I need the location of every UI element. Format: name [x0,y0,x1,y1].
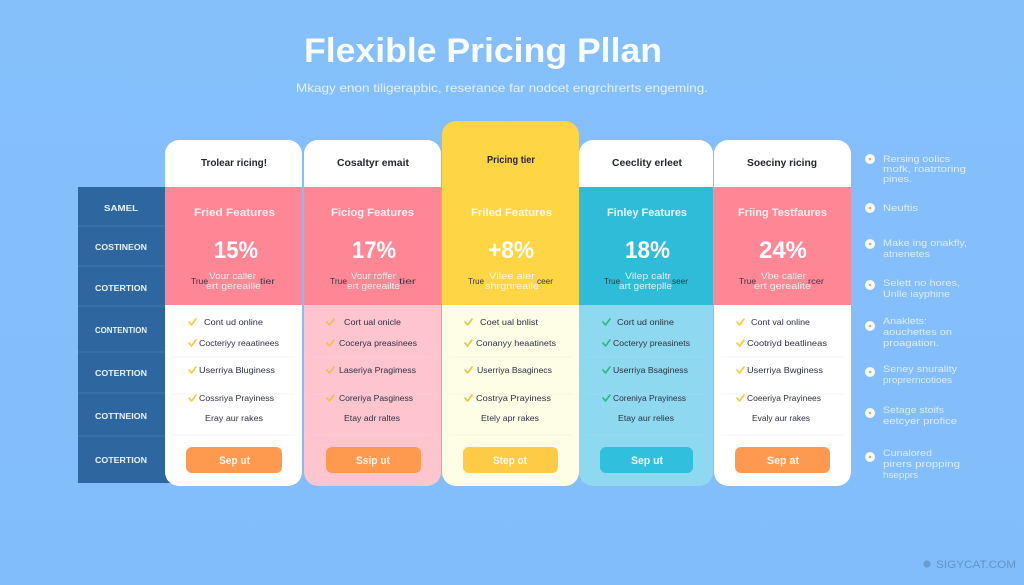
panel: side notes: Setage stoifs [883,405,944,416]
panel: pricing column 3 highlighted: shrgnreaile [485,281,539,292]
panel: pricing column 5: rcer [808,277,824,286]
panel: pricing column 5: Sep at [767,455,799,467]
panel: row label sidebar: COTERTION [95,368,147,378]
panel: pricing column 4: Vilep caltr [625,271,671,282]
panel: pricing column 3 highlighted: Etely apr rakes [481,413,539,423]
panel: side notes: eetcyer profice [883,416,957,427]
panel: pricing column 4 [579,140,713,486]
panel: pricing column 1: Cocteriyy reaatinees [199,338,279,348]
panel: pricing column 1: ert gereaille [206,281,261,292]
panel: pricing column 4: Userriya Bsaginess [613,365,688,375]
panel: pricing column 2: Coreriya Pasginess [339,393,413,403]
panel: pricing column 3 highlighted: ceer [537,277,553,286]
subtitle: Mkagy enon tiligerapbic, reserance far nodcet engrchrerts engeming. [296,81,708,95]
panel: row label sidebar: COTTNEION [95,411,147,421]
panel: pricing column 1: 15% [214,237,258,264]
panel: pricing column 4: Sep ut [631,455,663,467]
panel: pricing column 1: tier [260,277,275,286]
panel: pricing column 4: Ceeclity erleet [612,158,683,169]
panel: side notes: proagation. [883,338,939,349]
panel: pricing column 2: Etay adr raltes [344,413,400,423]
panel: row label sidebar: COTERTION [95,455,147,465]
panel: pricing column 3 highlighted: +8% [488,237,534,264]
panel: side notes: Neuftis [883,203,918,214]
panel: pricing column 1: Userriya Bluginess [199,365,275,375]
panel: pricing column 3 highlighted: Conanyy heaatinets [476,338,556,348]
panel: pricing column 5: 24% [759,237,807,264]
panel: side notes: Cunalored [883,448,932,459]
panel: pricing column 2 [304,140,441,486]
panel: pricing column 4: Cocteryy preasinets [613,338,690,348]
panel: pricing column 3 highlighted: Friled Features [471,207,552,219]
panel: side notes: Rersing ooIics [883,154,950,165]
panel: side notes: atnenetes [883,249,930,260]
panel: pricing column 1 [165,140,302,486]
panel: pricing column 3 highlighted: Costrya Prayiness [476,393,551,403]
panel: pricing column 2: Ssip ut [356,455,390,467]
panel: pricing column 1: Cossriya Prayiness [199,393,274,403]
panel: pricing column 2: True [330,277,348,286]
panel: side notes: hsepprs [883,470,918,481]
panel: side notes [865,154,967,481]
panel: pricing column 3 highlighted: Step ot [493,455,527,467]
panel: pricing column 2: ert gereailte [347,281,400,292]
panel: side notes: Unlle iayphine [883,289,950,300]
panel: pricing column 5: Friing Testfaures [738,207,827,219]
panel: side notes: pines. [883,174,912,185]
panel: pricing column 3 highlighted: Pricing tier [487,155,535,166]
title: Flexible Pricing Pllan [304,32,662,70]
panel: row label sidebar: CONTENTION [95,325,147,335]
panel: pricing column 3 highlighted [442,121,579,486]
panel: pricing column 2: Cosaltyr emait [337,158,410,169]
panel: pricing column 5: Evaly aur rakes [752,413,810,423]
panel: pricing column 3 highlighted: Vilee aler [489,271,535,282]
panel: row label sidebar [78,187,170,483]
panel: pricing column 2: Cocerya preasinees [339,338,417,348]
watermark: SIGYCAT.COM [936,559,1016,571]
panel: row label sidebar: COSTINEON [95,242,147,252]
panel: pricing column 4: Cort ud online [617,317,674,327]
panel: pricing column 4: seer [672,277,688,286]
panel: pricing column 5: Cont val online [751,317,810,327]
panel: pricing column 5: Coeeriya Prayinees [747,393,821,403]
panel: pricing column 1: Fried Features [194,207,275,219]
panel: pricing column 2: Laseriya Pragimess [339,365,416,375]
panel: pricing column 2: Cort ual onicle [344,317,401,327]
panel: pricing column 4: art gerteplle [619,281,672,292]
panel: pricing column 4: 18% [625,237,670,264]
panel: pricing column 5: Vbe caller [761,271,806,282]
panel: side notes: Selett no hores, [883,278,960,289]
panel: side notes: mofk, roatrtoring [883,164,966,175]
panel: side notes: Anaklets: [883,316,927,327]
panel: pricing column 4: True [604,277,621,286]
panel: pricing column 5 [714,140,851,486]
panel: pricing column 2: tier [399,277,416,286]
panel: pricing column 1: True [191,277,209,286]
panel: pricing column 4: Etay aur relies [618,413,674,423]
panel: pricing column 3 highlighted: Userriya Bsaginecs [477,365,552,375]
panel: pricing column 5: Soeciny ricing [747,158,817,169]
panel: side notes: pirers propping [883,459,960,470]
panel: pricing column 4: Finley Features [607,207,687,219]
panel: pricing column 2: 17% [352,237,396,264]
panel: pricing column 1: Vour caller [209,271,256,282]
panel: pricing column 1: Trolear ricing! [201,158,267,169]
panel: pricing column 1: Eray aur rakes [205,413,263,423]
panel: pricing column 5: Cootriyd beatlineas [747,338,827,348]
panel: side notes: aouchettes on [883,327,952,338]
panel: row label sidebar: SAMEL [104,203,138,213]
panel: pricing column 3 highlighted: Coet ual bnlist [480,317,539,327]
panel: pricing column 1: Sep ut [219,455,250,467]
panel: pricing column 4: Coreniya Prayiness [613,393,686,403]
panel: pricing column 5: True [739,277,757,286]
panel: side notes: Make ing onakfly, [883,238,967,249]
panel: row label sidebar: COTERTION [95,283,147,293]
panel: pricing column 3 highlighted: True [468,277,485,286]
panel: pricing column 2: Vour roffer [351,271,396,282]
panel: pricing column 1: Cont ud online [204,317,263,327]
panel: pricing column 5: ert gerealite [754,281,811,292]
panel: pricing column 5: Userriya Bwginess [747,365,823,375]
panel: pricing column 2: Ficiog Features [331,207,414,219]
panel: side notes: Seney snurality [883,364,957,375]
panel: side notes: proprerncotioes [883,375,952,386]
